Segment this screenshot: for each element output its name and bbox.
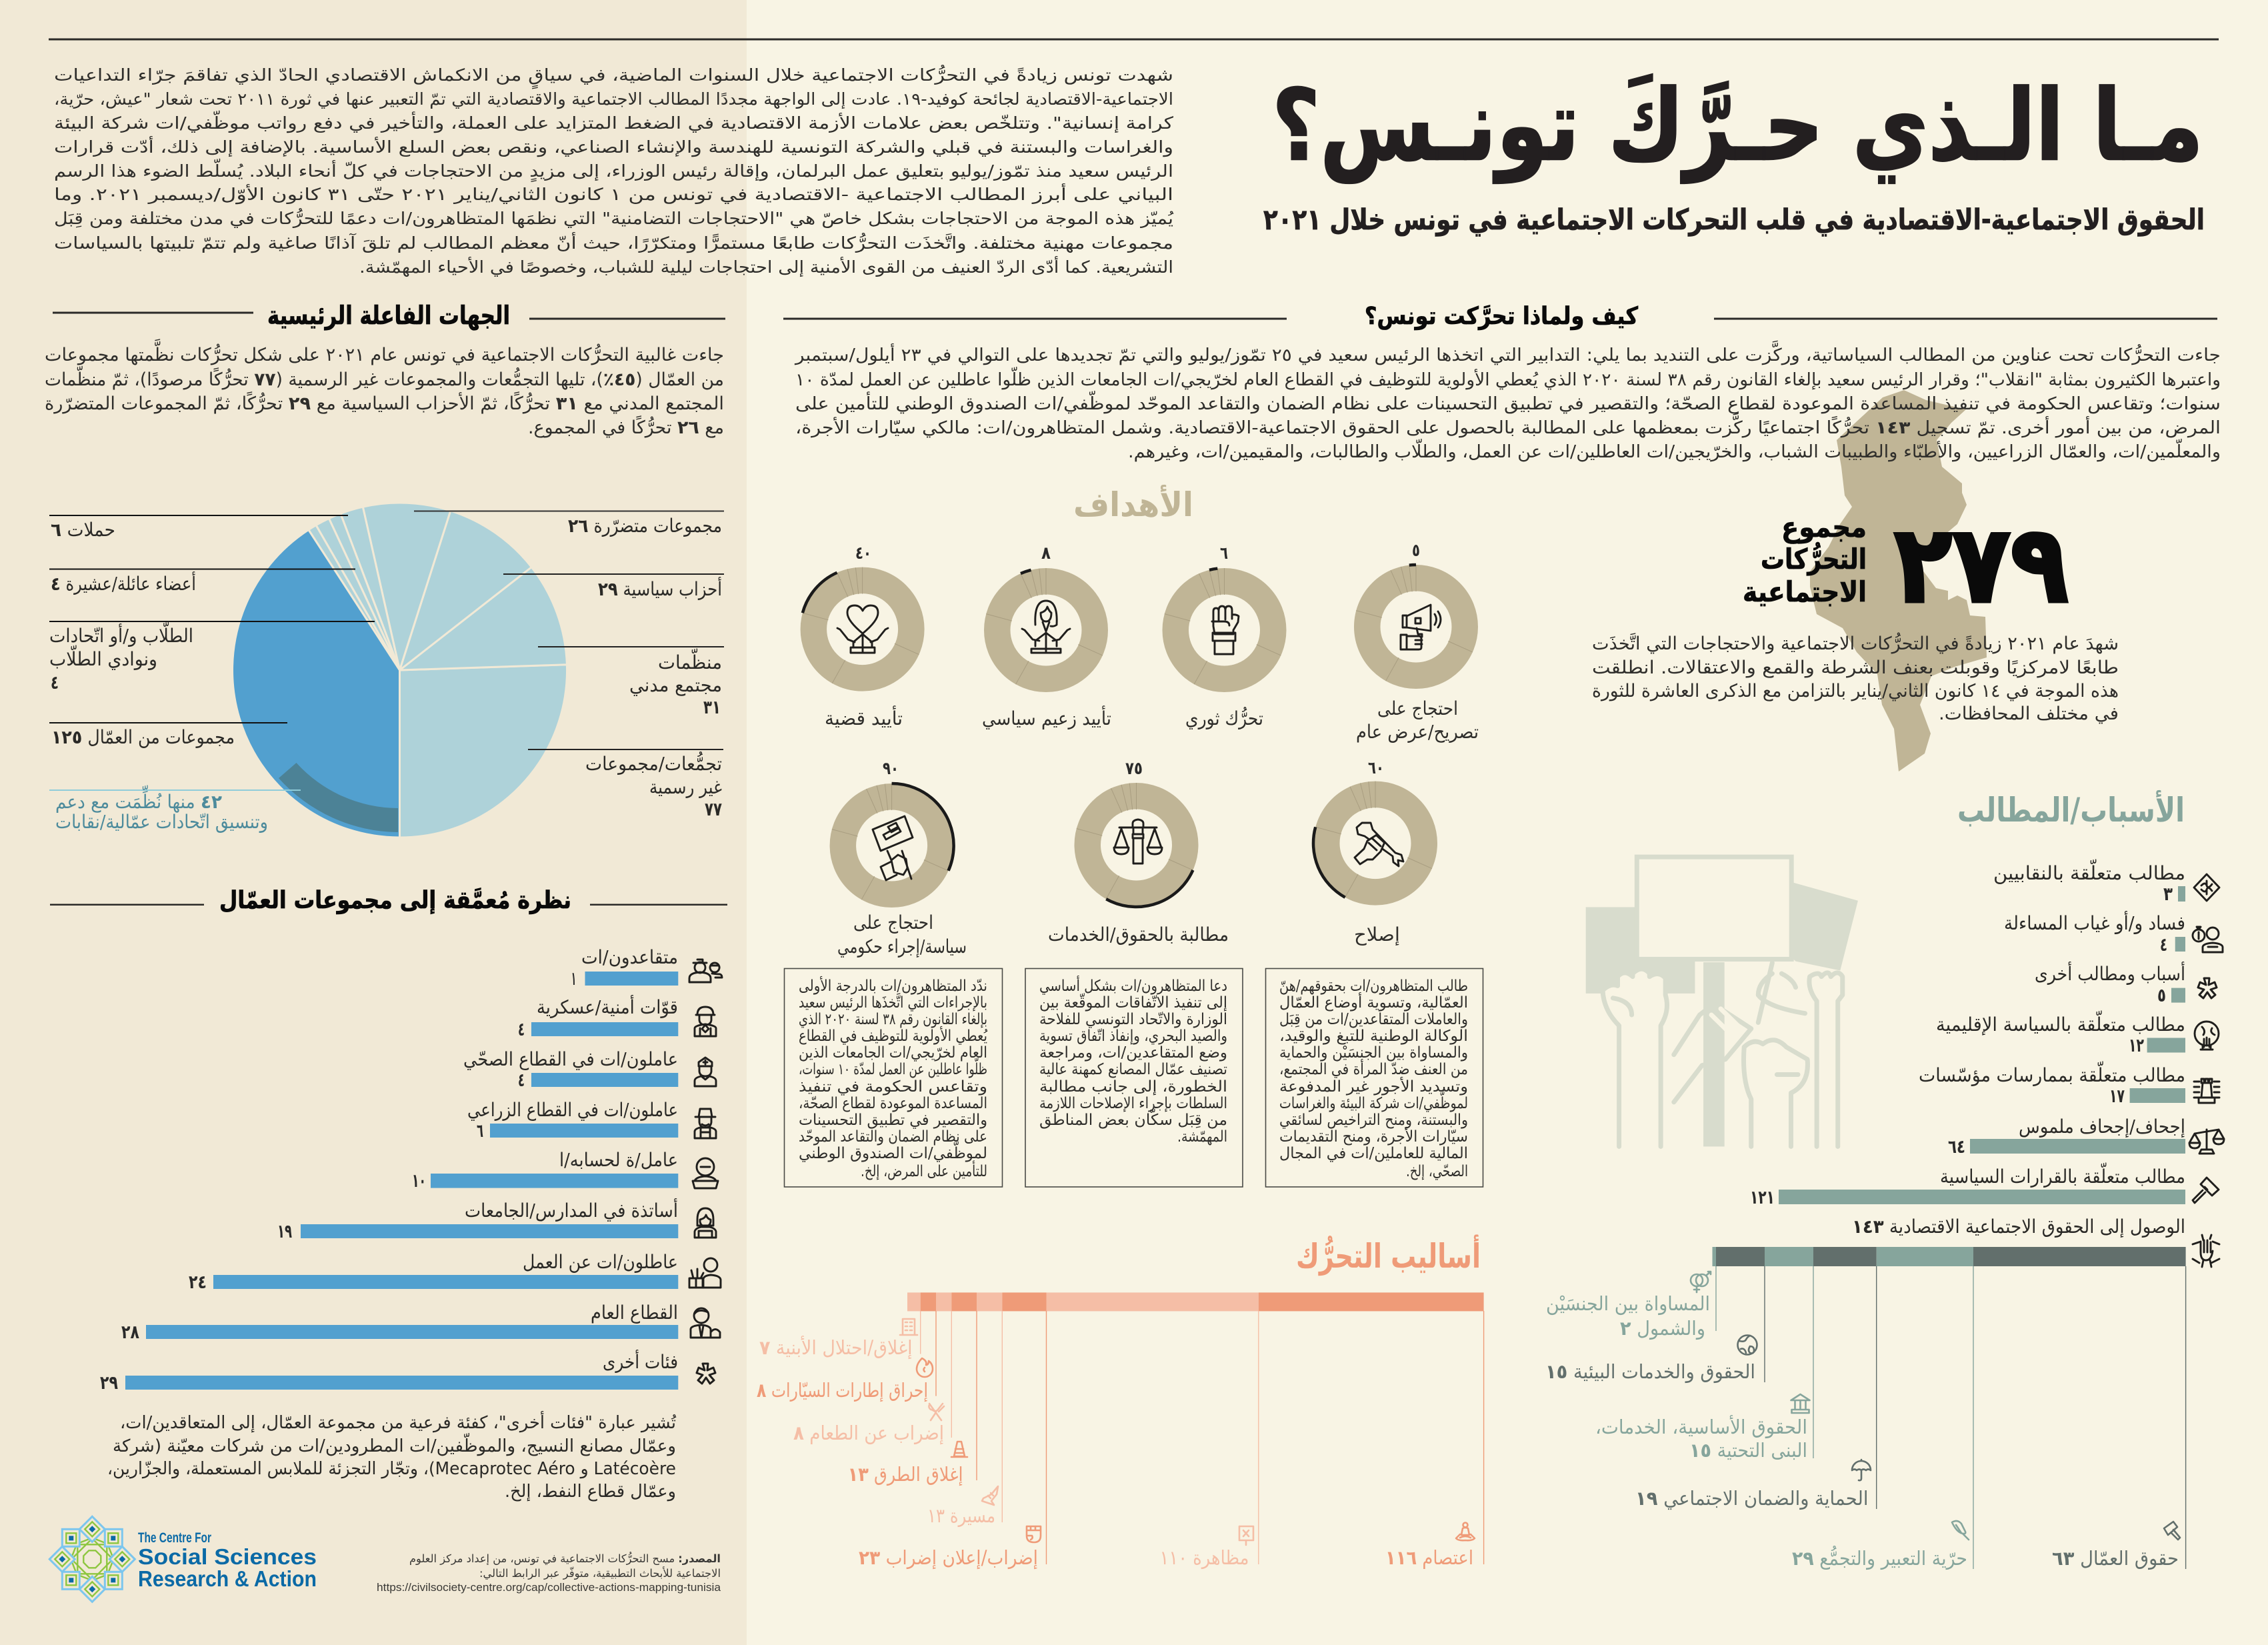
text block: 2021 summary: شهدَ عام ٢٠٢١ زيادةً في التحرُّكات الاجتماعية والاحتجاجات التي اتَّخذَت (1592, 632, 2119, 654)
row: retirees (571, 946, 722, 990)
row: teachers (277, 1198, 716, 1242)
slice: affected groups 26 (363, 503, 451, 670)
text block: 2021 summary (1592, 632, 2119, 724)
bar chart: causes (1750, 859, 2224, 1267)
row: security forces: قوّات أمنية/عسكرية (537, 994, 678, 1018)
pie callouts right: مجتمع مدني (629, 674, 722, 696)
slice: political parties 29 (400, 511, 531, 670)
logo: Centre for Social Sciences Research and Action (49, 1516, 317, 1602)
text box: policy protest detail: المساعدة الموعودة لقطاع الصحّة، (799, 1095, 987, 1112)
source credit: https://civilsociety-centre.org/cap/collective-actions-mapping-tunisia (377, 1582, 721, 1594)
donut: reform 60 (1291, 758, 1460, 946)
text block: main actors: المجتمع المدني مع ٣١ تحرُّكًا، ثمّ الأحزاب السياسية مع ٢٩ تحرُّكًا، ثمّ المجموعات المتضرّرة (45, 391, 724, 414)
donut: support political leader 8 (964, 543, 1128, 729)
text box: reform detail: والمساواة بين الجنسَيْن والحماية (1279, 1044, 1468, 1062)
source credit: المصدر: مسح التحرُّكات الاجتماعية في تونس، من إعداد مركز العلوم (409, 1552, 721, 1566)
row: security forces: ٤ (518, 1018, 525, 1040)
method: strike 23: إضراب/إعلان إضراب ٢٣ (859, 1546, 1038, 1570)
pie callouts right: ٧٧ (705, 798, 722, 820)
text box: policy protest detail (784, 968, 1003, 1187)
text box: rights and services detail (1025, 968, 1243, 1187)
logo emblem (49, 1516, 135, 1602)
pie callouts right: منظّمات (658, 648, 722, 673)
donut: policy protest 90 (830, 759, 967, 958)
row: other causes: ٥ (2157, 984, 2166, 1006)
right: freedom of expression 29: حرّية التعبير والتجمُّع ٢٩ (1792, 1546, 1967, 1570)
text block: main actors: من العمّال (٤٥٪)، تليها التجمُّعات والمجموعات غير الرسمية (٧٧ تحرُّكًا مرصودًا)، ثمّ منظّمات (45, 365, 724, 390)
text box: reform detail (1265, 968, 1483, 1187)
method: hunger strike 8: إضراب عن الطعام ٨ (793, 1422, 944, 1445)
row: political decisions (1750, 1162, 2219, 1208)
text box: rights and services detail: والصيد البحري، وإنفاذ اتّفاق تسوية (1039, 1028, 1227, 1045)
row: teachers: ١٩ (277, 1220, 292, 1242)
text box: rights and services detail: المهمّشة. (1177, 1128, 1227, 1146)
text box: policy protest detail: العام لخرّيجي/ات الجامعات الذين (799, 1044, 987, 1062)
right: workers' rights 63 (2052, 1522, 2180, 1570)
right: social protection 19: الحماية والضمان الاجتماعي ١٩ (1635, 1487, 1868, 1510)
row: unemployed: عاطلون/ات عن العمل (523, 1251, 678, 1273)
note: other categories: تُشير عبارة "فئات أخرى"، كفئة فرعية من مجموعة العمّال، إلى المتعاقدين/ات، (120, 1410, 677, 1433)
text box: reform detail: والبستنة، ومنح التراخيص لسائقي (1279, 1112, 1468, 1129)
right: basic rights and infrastructure 15: الحقوق الأساسية، الخدمات، (1595, 1414, 1807, 1438)
row: injustice (1948, 1116, 2224, 1158)
icon: raised fist (1212, 606, 1239, 654)
slice: worker groups 125 (233, 529, 400, 838)
text box: policy protest detail: بالإجراءات التي اتَّخذَها الرئيس سعيد (799, 993, 987, 1012)
row: self-employed: عامل/ة لحسابه/ا (559, 1149, 678, 1171)
text block: main actors (45, 338, 724, 438)
text box: reform detail: الصحّي، إلخ. (1406, 1163, 1468, 1180)
donut: reform 60: إصلاح (1354, 924, 1400, 946)
text box: reform detail: طالب المتظاهرون/ات بحقوقهم/هنّ (1279, 978, 1468, 995)
pie callouts right: أحزاب سياسية ٢٩ (598, 576, 722, 600)
row: corruption: ٤ (2160, 934, 2167, 956)
row: teachers: أساتذة في المدارس/الجامعات (465, 1198, 678, 1222)
row: health workers: ٤ (518, 1069, 525, 1091)
note: other categories (107, 1410, 677, 1502)
note: other categories: وعمّال قطاع النفط، إلخ. (505, 1482, 676, 1502)
right: environmental rights 15 (1545, 1335, 1757, 1383)
note: other categories: وعمّال مصانع النسيج، والموظّفين/ات المطرودين/ات من شركات معيّنة (شركة (113, 1432, 676, 1456)
logo wordmark: Research & Action (138, 1566, 317, 1591)
method: strike 23 (859, 1526, 1041, 1570)
right: gender equality 2 (1546, 1272, 1711, 1340)
row: health workers: عاملون/ات في القطاع الصحّي (463, 1048, 678, 1070)
total count: 279: مجموع (1781, 511, 1867, 544)
text box: reform detail: سيّارات الأجرة، ومنح التقديمات (1279, 1127, 1468, 1146)
row: regional policy: مطالب متعلّقة بالسياسة الإقليمية (1936, 1010, 2185, 1036)
text block: main actors: مع ٢٦ تحرُّكًا في المجموع. (528, 415, 724, 438)
icon: protest placard with hand (873, 816, 913, 880)
text box: reform detail: العمّالية، وتسوية أوضاع العمّال (1279, 992, 1468, 1012)
donut: support political leader 8: ٨ (1041, 543, 1051, 563)
row: unemployed (189, 1251, 721, 1293)
donut: revolutionary movement 6: تحرُّك ثوري (1185, 707, 1263, 729)
row: regional policy (1936, 1010, 2219, 1056)
right: basic rights and infrastructure 15 (1595, 1394, 1809, 1462)
text box: policy protest detail: ظلّوا عاطلين عن العمل لمدّة ١٠ سنوات، (799, 1058, 987, 1078)
row: other categories (100, 1349, 715, 1394)
method: hunger strike 8 (793, 1404, 944, 1445)
row: corruption (2004, 910, 2223, 956)
top rule (49, 39, 2219, 40)
row: socio-economic rights total (1852, 1216, 2219, 1267)
row: regional policy: ١٢ (2129, 1034, 2144, 1056)
row: other causes: أسباب ومطالب أخرى (2035, 961, 2185, 985)
text box: policy protest detail: على نظام الضمان والتقاعد الموحّد (799, 1128, 987, 1146)
text box: reform detail: لموظّفي/ات شركة البيئة والغراسات (1279, 1092, 1468, 1112)
pie callouts right: ٣١ (703, 696, 721, 718)
text box: rights and services detail: دعا المتظاهرون/ات بشكل أساسي (1039, 976, 1227, 995)
pie callouts right: تجمُّعات/مجموعات (585, 751, 722, 775)
method: occupying buildings 7: إغلاق/احتلال الأبنية ٧ (759, 1335, 913, 1360)
heading: workers: نظرة مُعمَّقة إلى مجموعات العمّال (219, 887, 571, 914)
method: road closure 13: إغلاق الطرق ١٣ (848, 1463, 963, 1486)
intro paragraph: التشريعية. كما أدّى الردّ العنيف من القوى الأمنية إلى احتجاجات ليلية للشباب، وخصوصًا في الأحياء المهمّشة. (359, 255, 1173, 277)
method: sit-in 116 (1385, 1523, 1475, 1569)
icon: heart in hands (837, 605, 888, 653)
text box: rights and services detail: الوزارة والاتّحاد التونسي للفلاحة (1039, 1011, 1227, 1028)
text block: main actors: جاءت غالبية التحرُّكات الاجتماعية في تونس عام ٢٠٢١ على شكل تحرُّكات نظَّمتها مجموعات (45, 338, 724, 365)
donut: support a cause 40: ٤٠ (855, 543, 871, 563)
right: social protection 19 (1635, 1460, 1871, 1510)
pie callouts left (49, 515, 375, 833)
row: unionist demands (1993, 859, 2219, 905)
text box: policy protest detail: ندّد المتظاهرون/ات بالدرجة الأولى (799, 976, 987, 995)
heading: main actors: الجهات الفاعلة الرئيسية (267, 301, 510, 330)
pie callouts right (414, 511, 724, 820)
intro paragraph: والغراسات والبستنة في قبلي والشركة التونسية للهندسة والإنشاء الصناعي، ونقص بعض السلع الأساسية. بالإضافة إلى ذلك، أدّت قرارات (54, 135, 1173, 157)
logo wordmark: Social Sciences (138, 1544, 317, 1569)
row: agriculture workers: عاملون/ات في القطاع الزراعي (467, 1099, 678, 1121)
method: occupying buildings 7 (759, 1319, 917, 1360)
text box: policy protest detail: للتأمين على المرض، إلخ. (861, 1160, 987, 1180)
slice: campaigns 6 (341, 507, 400, 670)
row: institutional practices (1919, 1061, 2219, 1107)
row: agriculture workers: ٦ (477, 1120, 483, 1142)
row: retirees: متقاعدون/ات (581, 946, 678, 968)
intro paragraph (54, 64, 1174, 277)
row: self-employed (412, 1149, 718, 1192)
chart: methods stacked bar (757, 1292, 1484, 1570)
method: march 13: مسيرة ١٣ (927, 1504, 995, 1527)
note: other categories: Latécoère و Mecaprotec Aéro)، وتجّار التجزئة للملابس المستعملة، والجزّارين، (107, 1459, 676, 1479)
heading: methods: أساليب التحرُّك (1296, 1234, 1481, 1276)
text box: policy protest detail: والتقصير في تطبيق التحسينات (799, 1112, 987, 1129)
pie callouts left: ٤٢ منها نُظِّمَت مع دعم (55, 785, 222, 813)
donut: rights and services 75: ٧٥ (1125, 759, 1143, 779)
slice: informal groups 77 (400, 665, 567, 838)
right: environmental rights 15: الحقوق والخدمات البيئية ١٥ (1545, 1360, 1755, 1383)
text block: how and why: واعتبرها الكثيرون بمثابة "انقلاب"؛ وقرار الرئيس سعيد بإلغاء القانون رقم ٣٨ لسنة ٢٠٢٠ الذي يُعطي الأولوية للتوظيف في القطاع العام لخرّيجي/ات الجامعات الذين ظلّوا عاطلين عن العمل لمدّة ١٠ (795, 366, 2221, 390)
logo wordmark: The Centre For (138, 1530, 211, 1546)
total count: 279: التحرُّكات (1761, 542, 1867, 576)
row: retirees: ١ (571, 968, 576, 990)
pie callouts left: حملات ٦ (51, 519, 115, 541)
pie callouts left: مجموعات من العمّال ١٢٥ (51, 726, 235, 748)
method: burning tires 8 (757, 1358, 933, 1402)
donut: policy protest 90: احتجاج على (853, 912, 933, 934)
row: corruption: فساد و/أو غياب المساءلة (2004, 910, 2185, 934)
row: unionist demands: ٣ (2163, 883, 2173, 905)
row: security forces (518, 994, 716, 1040)
intro paragraph: الاجتماعية-الاقتصادية لجائحة كوفيد-١٩. عادت إلى الواجهة مجددًا المطالب الاجتماعية والاقتصادية التي تمّ التعبير عنها في ثورة ٢٠١١ تحت شعار "عيش، حرّية، (54, 89, 1173, 109)
slice: civil society 31 (400, 567, 567, 670)
bar chart: workers (100, 946, 722, 1394)
row: injustice: إجحاف/إجحاف ملموس (2019, 1116, 2185, 1138)
text block: how and why: سنوات؛ وتقاعس الحكومة في تنفيذ المساعدة الموعودة لقطاع الصحّة؛ والتقصير في تطبيق التحسينات على نظام الضمان والتقاعد الموحّد لموظّفي/ات الصندوق الوطني للتأمين على (795, 390, 2221, 414)
right: basic rights and infrastructure 15: البنى التحتية ١٥ (1689, 1439, 1807, 1462)
right: workers' rights 63: حقوق العمّال ٦٣ (2052, 1547, 2179, 1570)
row: institutional practices: مطالب متعلّقة بممارسات مؤسّسات (1919, 1061, 2185, 1086)
pie callouts left: وتنسيق اتّحادات عمّالية/نقابات (55, 811, 268, 833)
slice: students 4 (316, 519, 400, 670)
slice: family members 4 (329, 513, 400, 670)
method: demonstration 110 (1160, 1526, 1253, 1569)
method: demonstration 110: مظاهرة ١١٠ (1160, 1546, 1249, 1569)
row: public sector (121, 1302, 720, 1343)
pie callouts left: ونوادي الطلّاب (49, 645, 157, 670)
donut: revolutionary movement 6: ٦ (1220, 543, 1228, 563)
text block: 2021 summary: هذه الموجة في ١٤ كانون الثاني/يناير بالتزامن مع الذكرى العاشرة للثورة (1592, 681, 2119, 701)
stacked bar segments (907, 1292, 1484, 1311)
logo wordmark (138, 1530, 317, 1591)
text box: policy protest detail: وتقاعس الحكومة في تنفيذ (799, 1078, 987, 1096)
icon: megaphone (1401, 605, 1441, 649)
text box: rights and services detail: إلى تنفيذ الاتّفاقات الموقّعة بين (1039, 993, 1227, 1012)
pie chart: actors (233, 503, 567, 838)
text box: reform detail: والعاملات المتقاعدين/ات من قِبَل (1279, 1011, 1468, 1028)
row: political decisions: مطالب متعلّقة بالقرارات السياسية (1940, 1162, 2185, 1188)
method: sit-in 116: اعتصام ١١٦ (1385, 1546, 1473, 1569)
map of Tunisia (1810, 390, 1987, 771)
total count: 279: ٢٧٩ (1894, 502, 2069, 627)
donut: rights and services 75 (1048, 759, 1229, 946)
slice: small remainder (309, 525, 400, 670)
donut: policy protest 90: سياسة/إجراء حكومي (837, 936, 967, 958)
intro paragraph: الرئيس سعيد منذ تمّوز/يوليو بتعليق عمل البرلمان، وإقالة رئيس الوزراء، إلى مزيدٍ من الاحتجاجات في كلّ أنحاء البلاد. يُسلّط الضوء هذا الرسم (54, 159, 1173, 182)
donut: revolutionary movement 6 (1149, 543, 1299, 729)
heading: objectives: الأهداف (1073, 484, 1193, 524)
intro paragraph: شهدت تونس زيادةً في التحرُّكات الاجتماعية خلال السنوات الماضية، في سياقٍ من الانكماش الاقتصادي الحادّ الذي تفاقمَ جرّاء التداعيات (54, 64, 1173, 89)
text block: how and why (794, 340, 2221, 462)
text box: rights and services detail: تصنيف عمّال المصانع كمهنة عالية (1039, 1061, 1227, 1078)
heading: main actors (53, 301, 725, 330)
row: injustice: ٦٤ (1948, 1136, 1965, 1158)
right: gender equality 2: المساواة بين الجنسَيْن (1546, 1292, 1710, 1315)
pie callouts right: غير رسمية (649, 776, 722, 798)
text block: 2021 summary: طابعًا لامركزيًا وقوبلت بعنف الشرطة والقمع والاعتقالات. انطلقت (1592, 657, 2119, 678)
donut: support political leader 8: تأييد زعيم سياسي (982, 705, 1111, 729)
donut: statement protest 5: تصريح/عرض عام (1356, 721, 1479, 743)
donut: reform 60: ٦٠ (1368, 758, 1384, 778)
chart: socio-economic rights stacked bar (1545, 1247, 2186, 1570)
text box: reform detail: من العنف ضدّ المرأة في المجتمع، (1279, 1059, 1468, 1078)
row: unemployed: ٢٤ (189, 1271, 207, 1293)
text block: how and why: جاءت التحرُّكات تحت عناوين من المطالب السياساتية، وركَّزت على التنديد بما يلي: التدابير التي اتخذها الرئيس سعيد في ٢٥ تمّوز/يوليو والتي تمّ تجديدها على التوالي في ٢٣ أيلول/سبتمبر (794, 340, 2221, 365)
row: other categories: فئات أخرى (603, 1349, 678, 1373)
total count: 279: الاجتماعية (1743, 575, 1867, 608)
text box: rights and services detail: السلطات بإجراء الإصلاحات اللازمة (1039, 1095, 1227, 1112)
total count: 279 (1743, 502, 2069, 627)
pie callouts left: ٤ (51, 671, 59, 693)
text box: reform detail: وتسديد الأجور غير المدفوعة (1279, 1077, 1468, 1096)
text box: policy protest detail: لموظّفي/ات الصندوق الوطني (799, 1142, 987, 1162)
pie callouts left: أعضاء عائلة/عشيرة ٤ (51, 571, 196, 595)
heading: how and why (783, 303, 2217, 330)
donut: statement protest 5 (1347, 541, 1485, 743)
slice: union-backed 42 (279, 763, 398, 832)
row: agriculture workers (467, 1099, 716, 1142)
row: self-employed: ١٠ (412, 1170, 426, 1192)
row: other causes (2035, 961, 2217, 1006)
donut: rights and services 75: مطالبة بالحقوق/الخدمات (1048, 924, 1229, 946)
row: socio-economic rights total: الوصول إلى الحقوق الاجتماعية الاقتصادية ١٤٣ (1852, 1216, 2185, 1238)
leader lines (1716, 1266, 2186, 1569)
donut: statement protest 5: احتجاج على (1377, 697, 1458, 720)
method: march 13 (927, 1486, 998, 1527)
intro paragraph: مجموعات مهنية مختلفة. واتَّخذَت التحرُّكات طابعًا مستمرًّا ومتكرّرًا، حيث أنّ معظم المطالب لم تلقَ آذانًا صاغية ولم تتمّ تلبيتها بالسياسات (54, 231, 1173, 253)
text box: policy protest detail: بإلغاء القانون رقم ٣٨ لسنة ٢٠٢٠ الذي (799, 1011, 987, 1028)
intro paragraph: يُميّز هذه الموجة من الاحتجاجات بشكل خاصّ هي "الاحتجاجات التضامنية" التي نظمَها المتظاهرون/ات دعمًا للتحرُّكات في مدن مختلفة ومن قِبَل (54, 207, 1174, 229)
row: unionist demands: مطالب متعلّقة بالنقابيين (1993, 859, 2185, 884)
icon: leader in hands (1022, 601, 1070, 653)
illustration: raised hands and placards (1586, 857, 1858, 1146)
text block: 2021 summary: في مختلف المحافظات. (1939, 703, 2119, 724)
text box: rights and services detail: الخطورة، إلى جانب مطالبة (1039, 1078, 1227, 1096)
donut: support a cause 40: تأييد قضية (825, 705, 903, 729)
stacked bar segments (1712, 1247, 2186, 1266)
heading: how and why: كيف ولماذا تحرَّكت تونس؟ (1365, 303, 1638, 330)
donut: support a cause 40 (786, 543, 939, 729)
source credit (377, 1552, 721, 1594)
row: health workers (463, 1048, 716, 1091)
text block: how and why: المرض، من بين أمور أخرى. تمّ تسجيل ١٤٣ تحرُّكًا اجتماعيًا ركَّزت بمعظمها على المطالبة بالحصول على الحقوق الاجتماعية-الاقتصادية. وشمل المتظاهرون/ات: مالكي سيّارات الأجرة، (795, 413, 2221, 438)
text box: policy protest detail: يُعطي الأولوية للتوظيف في القطاع (799, 1026, 988, 1045)
row: other categories: ٢٩ (100, 1372, 118, 1394)
panel: left column background (0, 0, 747, 1645)
icon: scales with fist (1114, 819, 1162, 864)
row: public sector: ٢٨ (121, 1321, 139, 1343)
leader lines (921, 1311, 1484, 1564)
donut: statement protest 5: ٥ (1412, 541, 1420, 561)
row: public sector: القطاع العام (591, 1302, 678, 1324)
donut: policy protest 90: ٩٠ (883, 759, 899, 779)
method: burning tires 8: إحراق إطارات السيّارات ٨ (757, 1379, 928, 1402)
intro paragraph: كرامة إنسانية". وتتلخّص بعض علامات الأزمة الاقتصادية في الضغط المتزايد على العملة، والتأخير في دفع رواتب موظّفي/ات شركة البيئة (54, 111, 1173, 133)
intro paragraph: البياني على أبرز المطالب الاجتماعية -الاقتصادية في تونس من ١ كانون الثاني/يناير ٢٠٢١ حتّى ٣١ كانون الأوّل/ديسمبر ٢٠٢١. وما (54, 183, 1173, 205)
heading: causes and demands: الأسباب/المطالب (1957, 789, 2185, 830)
text box: reform detail: الوكالة الوطنية للتبغ والوقيد، (1279, 1028, 1468, 1045)
row: institutional practices: ١٧ (2109, 1085, 2125, 1107)
method: road closure 13 (848, 1442, 967, 1486)
right: gender equality 2: والشمول ٢ (1620, 1317, 1705, 1340)
text box: rights and services detail: وضع المتقاعدين/ات، ومراجعة (1039, 1044, 1227, 1062)
text box: reform detail: المالية للعاملين/ات في المجال (1279, 1145, 1468, 1162)
pie callouts right: مجموعات متضرّرة ٢٦ (568, 515, 722, 537)
right: freedom of expression 29 (1792, 1521, 1969, 1570)
row: political decisions: ١٢١ (1750, 1186, 1775, 1208)
pie callouts left: الطلّاب و/أو اتّحادات (49, 621, 193, 647)
source credit: الاجتماعية للأبحاث التطبيقية، متوفّر عبر الرابط التالي: (479, 1566, 721, 1580)
text box: rights and services detail: من قِبَل سكّان بعض المناطق (1039, 1109, 1227, 1129)
icon: wrench in fist (1355, 823, 1403, 866)
text block: how and why: والمعلّمين/ات، والعمّال الزراعيين، والأطبّاء والطبيبات الشباب، والخرّيجين/ات العاطلين/ات عن العمل، والطلّاب والطالبات، والمقيمين/ات، وغيرهم. (1128, 438, 2221, 462)
